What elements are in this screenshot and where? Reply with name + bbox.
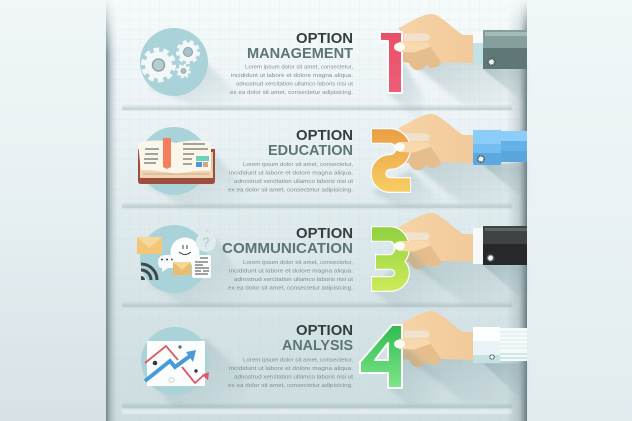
heading: option education [268,127,353,159]
heading: option education: EDUCATION [268,142,353,159]
text block: option 2 body: incididunt ut labore et dolore magna aliqua. [229,170,354,176]
icon: gears [140,28,240,106]
icon: chart [141,327,245,408]
icon: cuff button [490,355,494,359]
panel: option 4 analysis [141,311,527,408]
numeral 3 [371,234,445,307]
hand with blue sleeve [398,114,527,208]
hand with grey sleeve [398,14,527,108]
text block: option 3 body: ex ea dolor sit amet, consectetur adipisicing. [228,286,353,292]
thumb 2 [394,142,430,152]
thumb 3 [394,241,430,252]
text block: option 1 body: ex ea dolor sit amet, consectetur adipisicing. [230,90,353,96]
text block: option 4 body: Lorem ipsum dolor sit amet, consectetur, [243,358,353,364]
text block: option 3 body [228,260,354,292]
hand with white sleeve [398,311,527,405]
numeral 1 [380,32,424,125]
heading: option management: MANAGEMENT [247,45,353,62]
text block: option 4 body: ex ea dolor sit amet, consectetur adipisicing. [228,383,353,389]
text block: option 2 body: adnostrud xercitation ullamco laboris nisi ut [234,179,353,185]
heading: option communication: OPTION [296,225,353,242]
text block: option 2 body: ex ea dolor sit amet, consectetur adipisicing. [228,188,353,194]
hand with black sleeve [398,213,527,307]
icon: book [138,127,245,208]
icon: communication cluster: ? [202,234,210,250]
text block: option 2 body: Lorem ipsum dolor sit amet, consectetur, [243,162,353,168]
heading: option analysis: ANALYSIS [282,337,353,354]
text block: option 4 body: incididunt ut labore et dolore magna aliqua. [229,366,354,372]
panel: option 2 education [138,114,527,208]
heading: option analysis: OPTION [296,322,353,339]
text block: option 3 body: Lorem ipsum dolor sit amet, consectetur, [243,260,353,266]
icon: cuff button [487,255,494,261]
text block: option 4 body: adnostrud xercitation ullamco laboris nisi ut [234,374,353,380]
numeral 4 [360,325,440,405]
heading: option communication [222,225,353,257]
panel: option 3 communication [137,213,527,307]
heading: option education: OPTION [296,127,353,144]
text block: option 1 body: Lorem ipsum dolor sit amet, consectetur, [245,64,353,70]
text block: option 2 body [228,162,354,194]
text block: option 4 body [228,358,354,389]
heading: option analysis [282,322,353,354]
icon: communication cluster [137,225,245,306]
heading: option management: OPTION [296,30,353,47]
text block: option 1 body: adnostrud xercitation ullamco laboris nisi ut [236,82,353,88]
icon: cuff button [478,156,484,162]
text block: option 3 body: incididunt ut labore et dolore magna aliqua. [229,268,354,274]
panel: option 1 management [140,14,527,125]
heading: option management [247,30,353,62]
heading: option communication: COMMUNICATION [222,240,353,257]
thumb 4 [394,339,430,350]
thumb 1 [394,42,430,52]
text block: option 1 body: incididunt ut labore et dolore magna aliqua. [231,73,353,79]
icon: cuff button [488,59,495,65]
panel: infographic sheet [106,0,527,421]
text block: option 3 body: adnostrud xercitation ullamco laboris nisi ut [234,277,353,283]
numeral 2 [371,136,440,208]
text block: option 1 body [230,64,353,96]
